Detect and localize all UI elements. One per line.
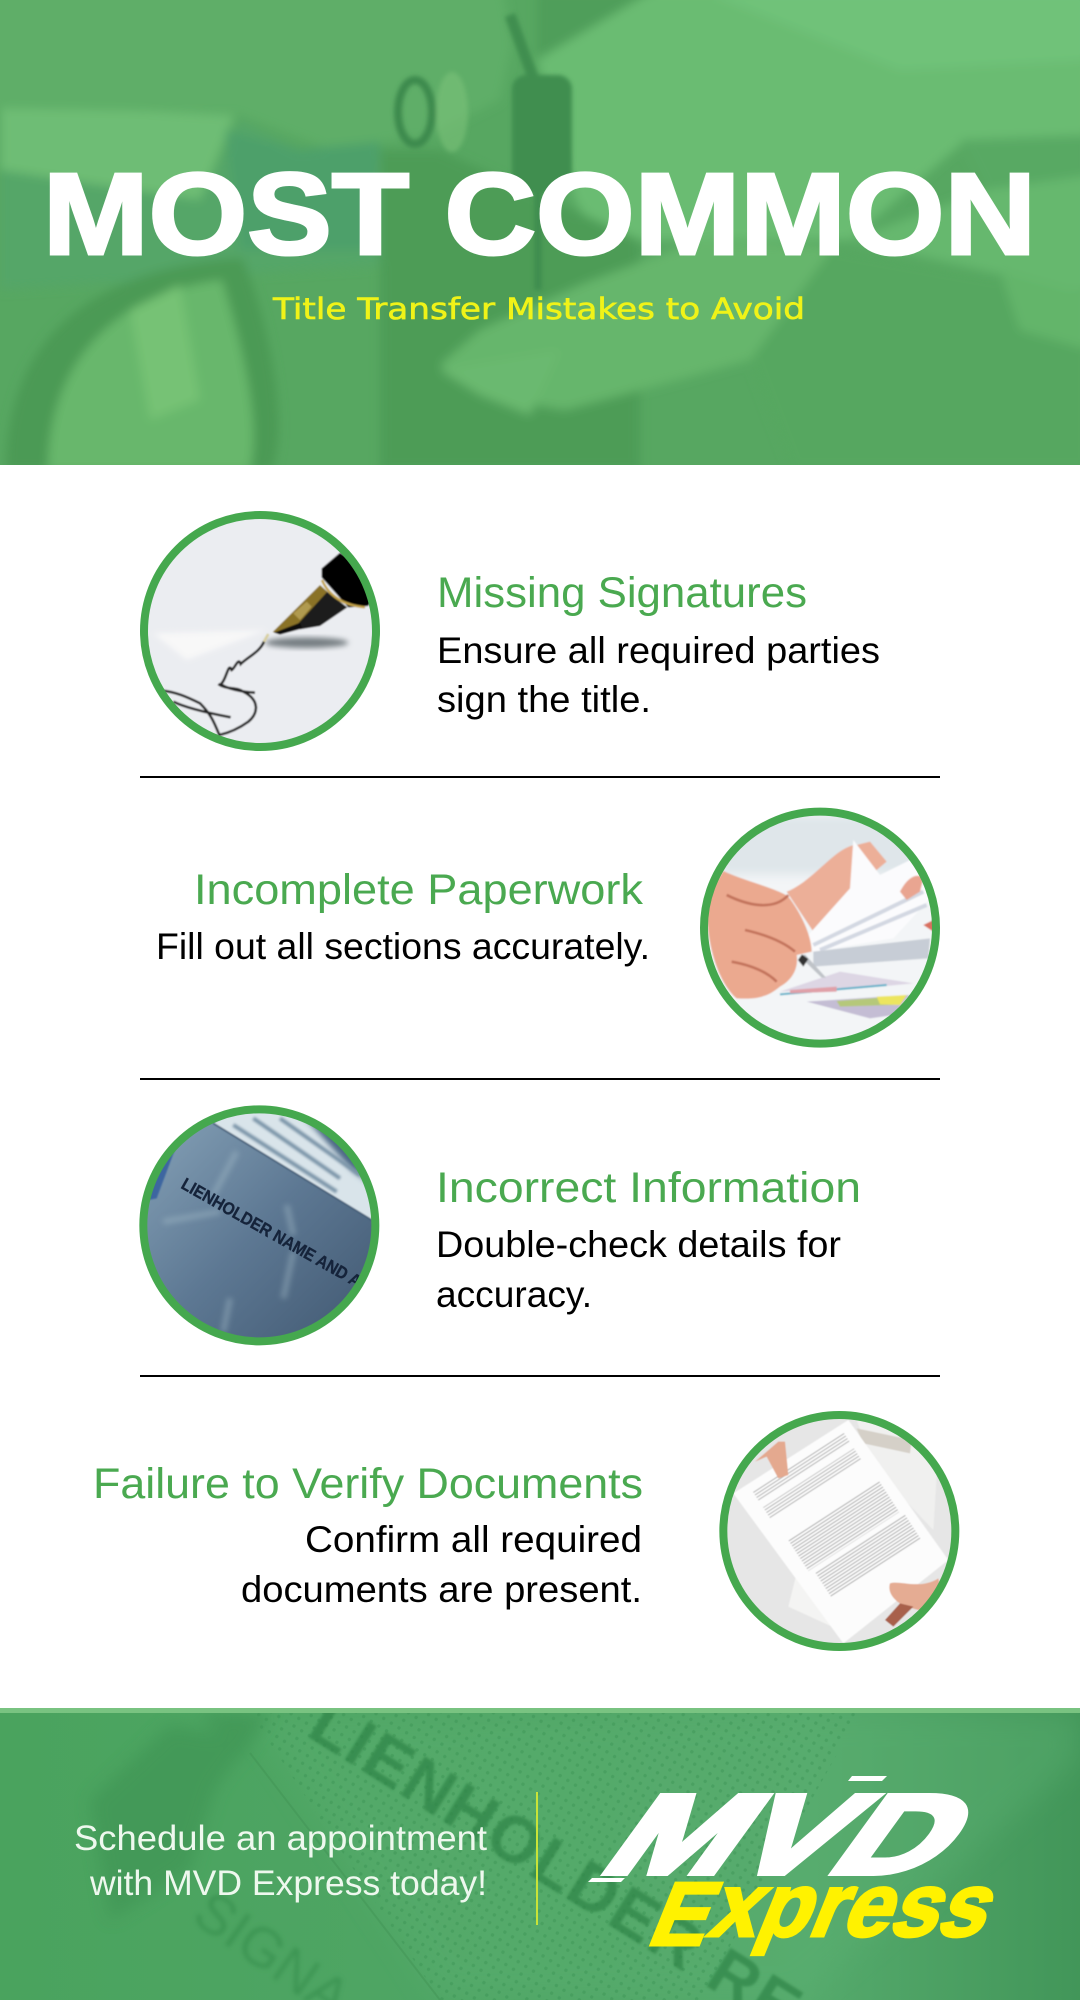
call to action text: Schedule an appointment bbox=[74, 1819, 487, 1858]
header panel with tinted handover photo bbox=[0, 0, 1080, 470]
description: sign the title. bbox=[437, 679, 651, 720]
logo: MVD Express: xpress bbox=[698, 1854, 1015, 1955]
heading: Failure to Verify Documents bbox=[93, 1460, 643, 1508]
icon: pen signing paper bbox=[140, 510, 383, 753]
heading: Incomplete Paperwork bbox=[194, 866, 644, 914]
panel: failure to verify documents bbox=[93, 1410, 960, 1653]
heading: Incorrect Information bbox=[436, 1164, 861, 1212]
description: documents are present. bbox=[241, 1569, 642, 1610]
panel: missing signatures bbox=[140, 510, 880, 753]
icon: lienholder document close-up: LIENHOLDER NAME AND A bbox=[178, 1174, 365, 1291]
description: Confirm all required bbox=[305, 1519, 642, 1560]
heading: Missing Signatures bbox=[437, 569, 807, 617]
logo: MVD Express: E bbox=[637, 1863, 738, 1964]
logo: MVD Express bbox=[579, 1772, 1015, 1964]
footer photo background bbox=[0, 1684, 1080, 2000]
panel: incomplete paperwork bbox=[156, 805, 940, 1048]
description: Fill out all sections accurately. bbox=[156, 926, 650, 967]
title: MOST COMMON bbox=[43, 149, 1036, 279]
description: Ensure all required parties bbox=[437, 630, 880, 671]
description: Double-check details for bbox=[436, 1224, 841, 1265]
icon: hands holding document bbox=[720, 1410, 960, 1653]
header photo background bbox=[0, 0, 1080, 470]
footer panel bbox=[0, 1684, 1080, 2000]
icon: hand writing on paperwork bbox=[700, 805, 940, 1048]
icon: lienholder document close-up bbox=[140, 1105, 387, 1348]
subtitle: Title Transfer Mistakes to Avoid bbox=[272, 292, 805, 326]
description: accuracy. bbox=[436, 1274, 592, 1315]
panel: incorrect information bbox=[140, 1105, 861, 1348]
call to action text: with MVD Express today! bbox=[89, 1864, 487, 1903]
logo: MVD Express: MVD bbox=[579, 1772, 1007, 1897]
